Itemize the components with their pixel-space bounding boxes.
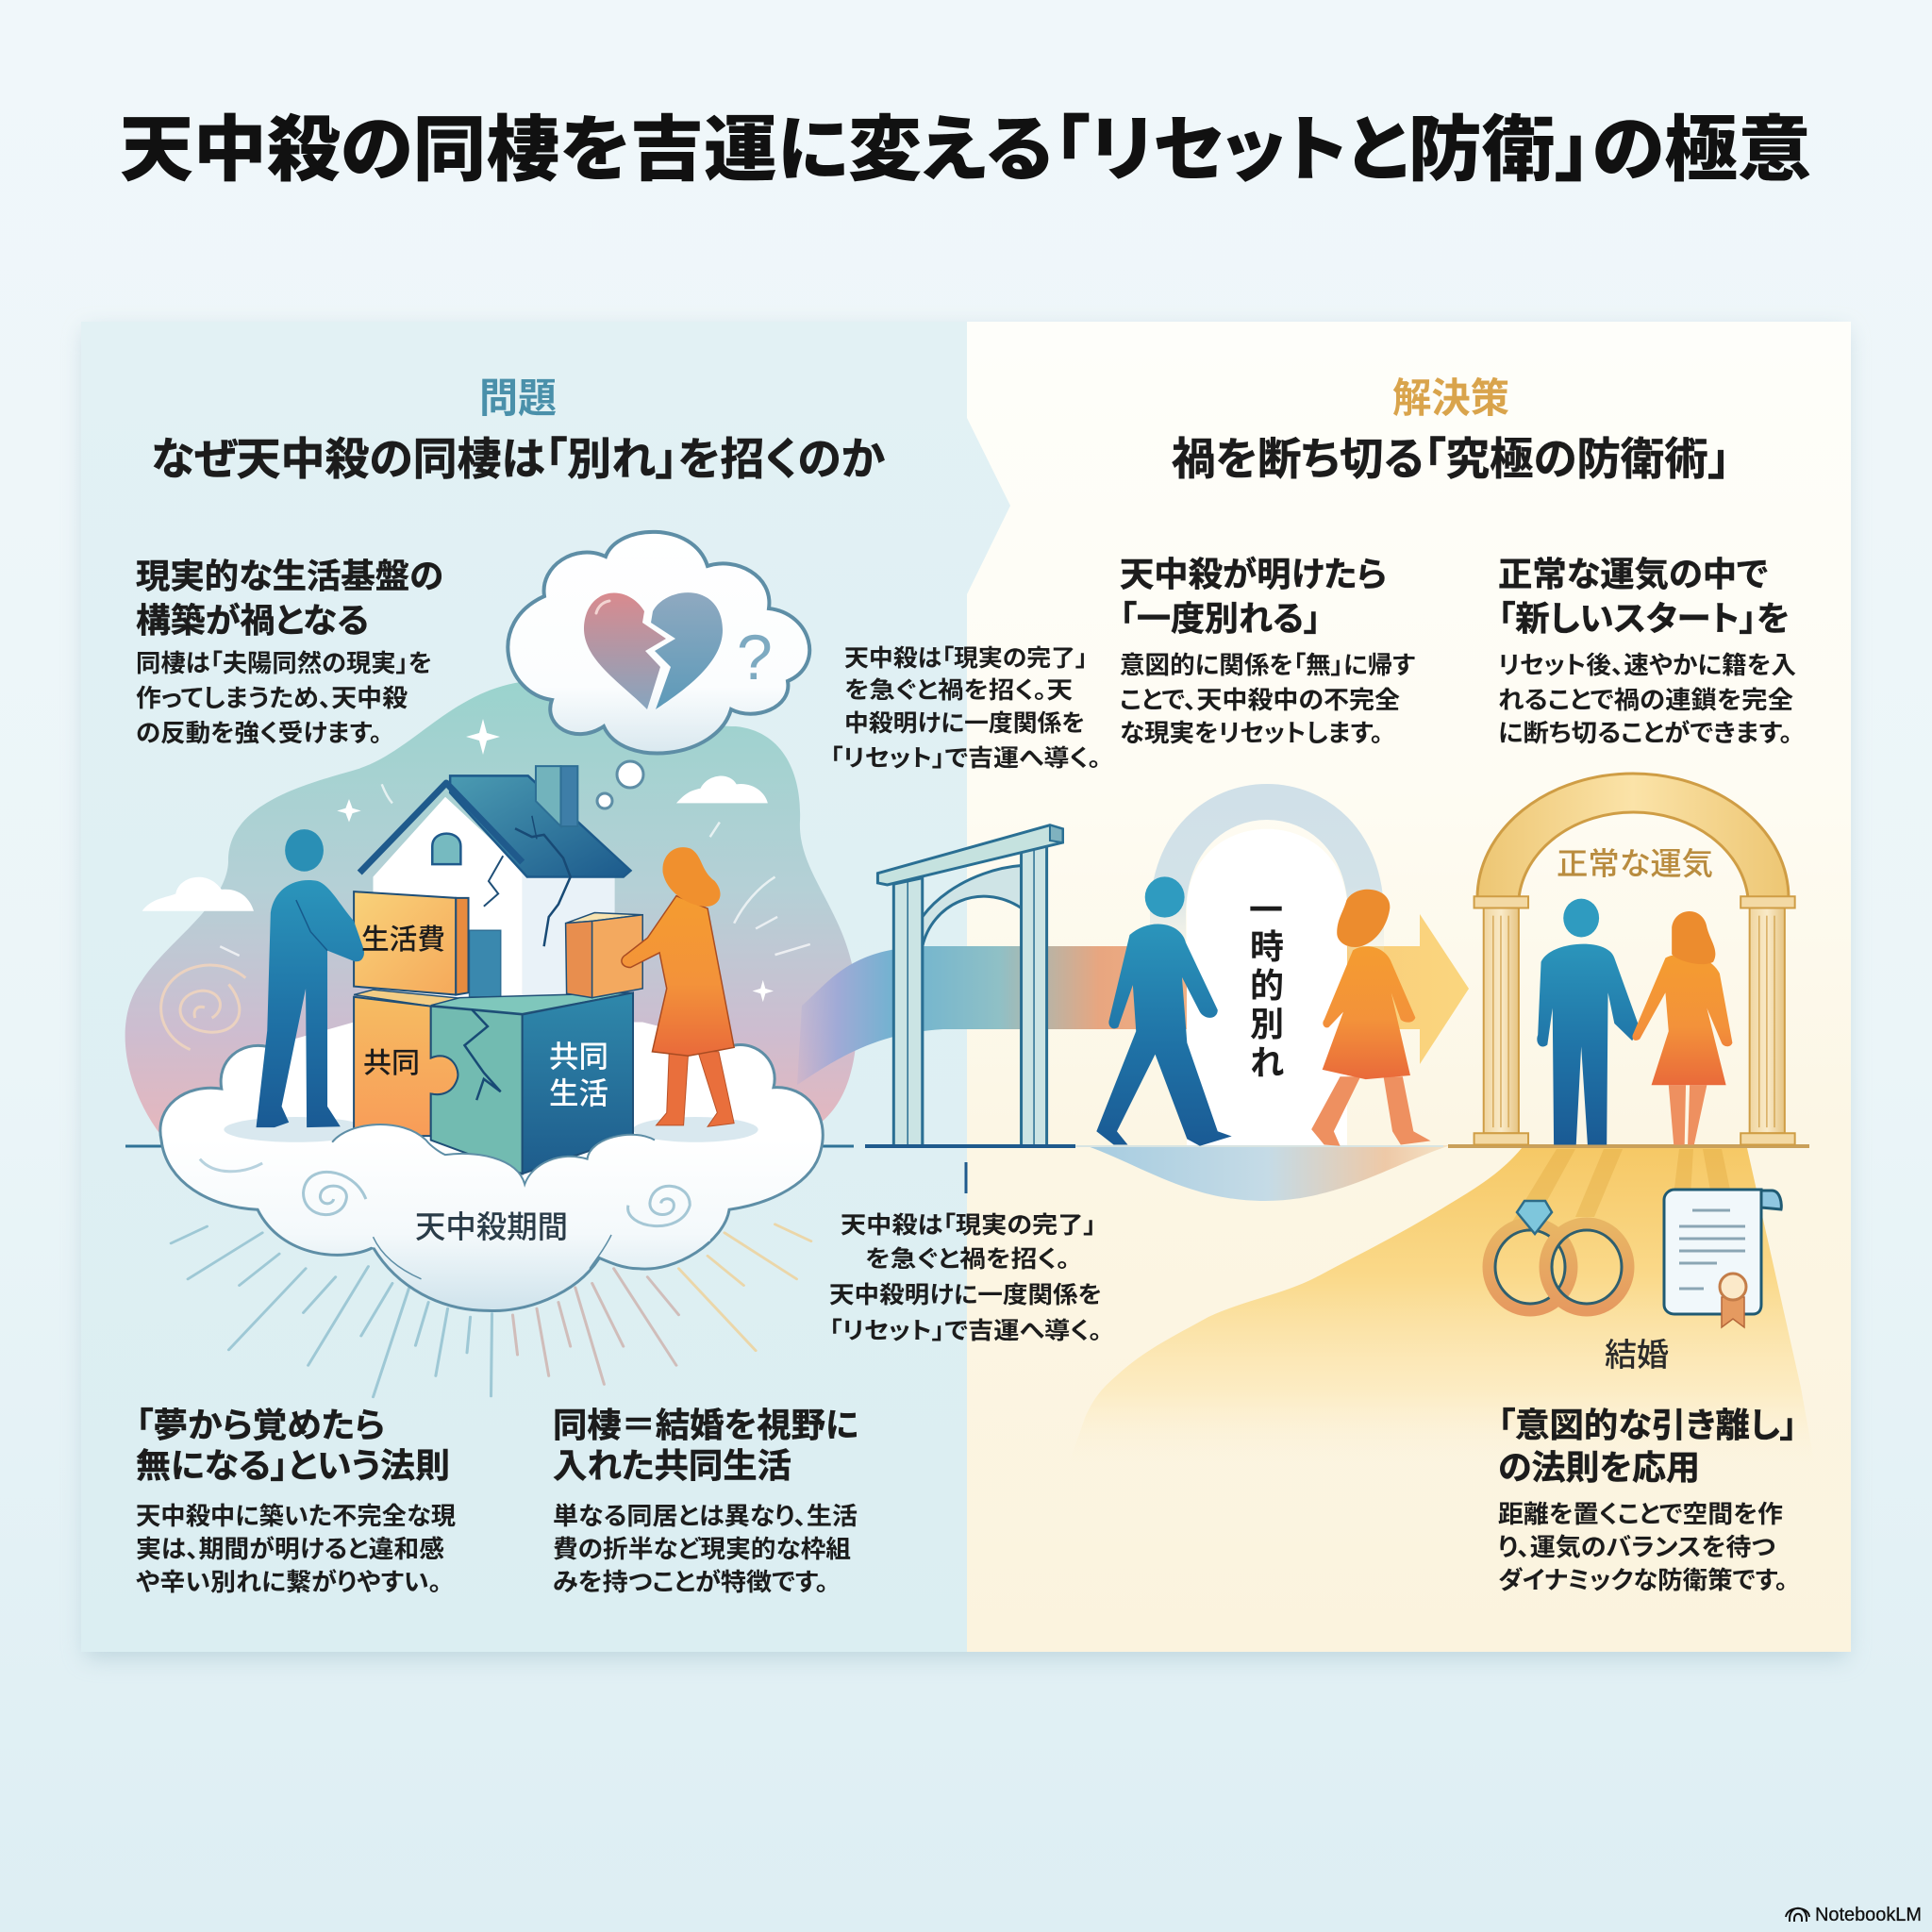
- question mark: ?: [737, 622, 773, 693]
- ground line: [125, 1145, 854, 1147]
- gable: [359, 783, 523, 873]
- text block: cohabitation equals marriage: 同棲＝結婚を視野に: [553, 1406, 858, 1444]
- text block: one-time parting: [1120, 555, 1415, 747]
- text block: dream law: 天中殺中に築いた不完全な現: [136, 1502, 456, 1530]
- text block: center lower note: を急ぐと禍を招く。: [865, 1246, 1070, 1273]
- illustration: gate: [877, 825, 1062, 1146]
- text block: intentional separation: の法則を応用: [1498, 1448, 1700, 1487]
- sunburst rays: [171, 1224, 811, 1397]
- text block: life foundation: 同棲は「夫陽同然の現実」を: [136, 649, 432, 677]
- panel shadow: [85, 330, 1847, 1658]
- figure: woman: [657, 1052, 734, 1126]
- text block: one-time parting: な現実をリセットします。: [1120, 719, 1383, 747]
- heading: problem: 問題: [479, 376, 557, 422]
- text block: center lower note: 「リセット」で吉運へ導く。: [829, 1318, 1102, 1344]
- text block: dream law: 実は、期間が明けると違和感: [136, 1535, 444, 1563]
- text block: new start: に断ち切ることができます。: [1498, 719, 1792, 747]
- text block: intentional separation: [1498, 1406, 1797, 1594]
- label: normal fortune: 正常な運気: [1557, 846, 1713, 881]
- cloud base: [160, 1023, 823, 1311]
- ground shadow: [1085, 1145, 1451, 1201]
- heading: problem: [151, 376, 885, 484]
- text block: one-time parting: ことで、天中殺中の不完全: [1120, 686, 1400, 714]
- door: [470, 930, 501, 997]
- heading: problem: なぜ天中殺の同棲は「別れ」を招くのか: [151, 434, 885, 484]
- couple man: [1563, 899, 1599, 937]
- text block: center upper note: 「リセット」で吉運へ導く。: [830, 745, 1101, 772]
- vertical label: 一: [1249, 891, 1283, 929]
- text block: center upper note: 天中殺は「現実の完了」: [844, 645, 1088, 672]
- text block: one-time parting: 「一度別れる」: [1120, 599, 1321, 638]
- text block: center lower note: 天中殺明けに一度関係を: [829, 1282, 1102, 1308]
- text block: dream law: 無になる」という法則: [136, 1446, 450, 1485]
- illustration: house on cloud: [125, 680, 1469, 1397]
- small box: [566, 912, 642, 924]
- heading: solution: 禍を断ち切る「究極の防衛術」: [1172, 434, 1730, 484]
- vertical label: 時: [1250, 927, 1284, 966]
- label: joint: 共同: [363, 1048, 420, 1079]
- puzzle top slab: [354, 990, 498, 1007]
- text block: new start: れることで禍の連鎖を完全: [1498, 686, 1793, 714]
- gate left column: [893, 878, 923, 1146]
- spiral decoration: [161, 965, 245, 1050]
- text block: intentional separation: り、運気のバランスを待つ: [1498, 1533, 1775, 1561]
- ground line gold: [1448, 1144, 1809, 1148]
- text block: life foundation: 作ってしまうため、天中殺: [136, 684, 408, 712]
- text block: dream law: や辛い別れに繋がりやすい。: [135, 1568, 441, 1596]
- roof: [450, 775, 630, 877]
- arch ring: [1168, 802, 1366, 981]
- label: cohabitation: [549, 1040, 608, 1110]
- text block: life foundation: の反動を強く受けます。: [136, 719, 382, 747]
- walking man: [1145, 876, 1185, 918]
- gate beam: [877, 825, 1062, 885]
- text block: new start: [1498, 555, 1796, 747]
- text block: intentional separation: ダイナミックな防衛策です。: [1498, 1566, 1788, 1594]
- vertical label: 別: [1250, 1005, 1284, 1043]
- panel: problem background with chevron: [81, 322, 1010, 1652]
- text block: life foundation: 現実的な生活基盤の: [136, 557, 443, 595]
- text block: center lower note: [829, 1212, 1102, 1344]
- text block: cohabitation equals marriage: みを持つことが特徴です。: [553, 1568, 828, 1596]
- cracks: [484, 856, 503, 907]
- text block: center upper note: 中殺明けに一度関係を: [844, 710, 1085, 737]
- text block: new start: 正常な運気の中で: [1498, 555, 1768, 593]
- text block: intentional separation: 距離を置くことで空間を作: [1498, 1500, 1783, 1528]
- text block: new start: リセット後、速やかに籍を入: [1498, 651, 1796, 679]
- puzzle blue piece: [523, 992, 633, 1174]
- white arch interior: [1187, 829, 1347, 1146]
- gold light streaks: [1509, 1149, 1736, 1226]
- figure: man: [285, 829, 324, 872]
- background blob: [125, 680, 858, 1146]
- text block: cohabitation equals marriage: 単なる同居とは異なり、生活: [553, 1502, 858, 1530]
- label: living costs: 生活費: [361, 924, 445, 956]
- icon: wedding rings: [1489, 1201, 1628, 1310]
- gate right column: [1022, 845, 1047, 1146]
- tick mark: [964, 1162, 968, 1193]
- arrow ribbon start behind cloud: [797, 914, 1469, 1085]
- title: 天中殺の同棲を吉運に変える「リセットと防衛」の極意: [120, 110, 1811, 191]
- side wall: [523, 871, 615, 1002]
- text block: intentional separation: 「意図的な引き離し」: [1498, 1406, 1797, 1444]
- text block: one-time parting: 天中殺が明けたら: [1120, 555, 1387, 593]
- label: cohabitation: 共同: [549, 1040, 608, 1074]
- text block: cohabitation equals marriage: 費の折半など現実的な枠組: [553, 1535, 851, 1563]
- vertical label: れ: [1250, 1043, 1284, 1082]
- arch top: [1477, 774, 1789, 898]
- cloud front: [258, 1124, 710, 1247]
- box: living costs: [354, 891, 456, 995]
- puzzle orange piece: [354, 997, 458, 1136]
- text block: cohabitation equals marriage: 入れた共同生活: [553, 1446, 791, 1485]
- NotebookLM badge: NotebookLM: [1815, 1905, 1922, 1925]
- text block: cohabitation equals marriage: [553, 1406, 858, 1596]
- label: marriage: 結婚: [1605, 1338, 1669, 1374]
- text block: one-time parting: 意図的に関係を「無」に帰す: [1120, 651, 1415, 679]
- window: [432, 834, 460, 864]
- text block: center lower note: 天中殺は「現実の完了」: [841, 1212, 1096, 1239]
- ground line at gate: [865, 1144, 1075, 1148]
- text block: new start: 「新しいスタート」を: [1498, 599, 1790, 638]
- panel: solution background: [966, 322, 1851, 1652]
- vertical label: 的: [1250, 966, 1284, 1005]
- broken heart left: [584, 593, 666, 709]
- text block: dream law: [135, 1406, 456, 1596]
- illustration: golden arch and couple: [1448, 774, 1809, 1146]
- couple woman: [1669, 1085, 1707, 1145]
- label: tenchusatsu period: 天中殺期間: [415, 1209, 568, 1244]
- gold path of good fortune: [1066, 1148, 1816, 1472]
- broken heart right: [651, 592, 723, 709]
- small clouds: [142, 877, 254, 911]
- cloud swirls: [304, 1172, 366, 1215]
- text block: dream law: 「夢から覚めたら: [136, 1406, 385, 1444]
- left column: [1484, 908, 1519, 1133]
- chimney: [536, 766, 560, 826]
- heading: solution: 解決策: [1392, 376, 1509, 422]
- walking woman: [1311, 1076, 1431, 1146]
- illustration: temporary parting: [1075, 802, 1451, 1201]
- front wall: [374, 797, 523, 1002]
- heading: solution: [1172, 376, 1730, 484]
- icon: marriage certificate: [1664, 1190, 1781, 1327]
- text block: life foundation: 構築が禍となる: [136, 601, 369, 640]
- puzzle teal piece: [431, 1007, 523, 1174]
- sparkles: [337, 799, 774, 1002]
- thought bubbles small: [617, 761, 643, 788]
- sparkle on blob: [466, 719, 500, 755]
- label: cohabitation: 生活: [549, 1076, 608, 1110]
- text block: center upper note: を急ぐと禍を招く。天: [844, 677, 1073, 704]
- text block: center upper note: [830, 645, 1101, 772]
- text block: life foundation: [136, 557, 443, 747]
- thought bubble with broken heart: [508, 532, 809, 808]
- right column: [1750, 908, 1785, 1133]
- gate arch band: [909, 866, 1022, 1146]
